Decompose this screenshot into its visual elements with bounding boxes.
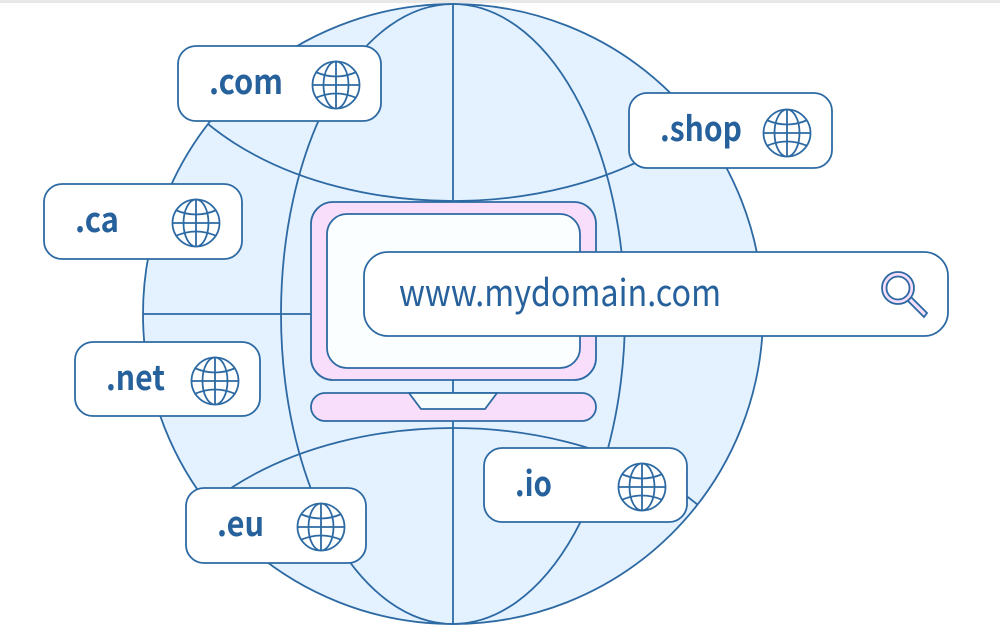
tag: .eu: .eu — [217, 497, 264, 546]
top edge line — [0, 0, 1000, 3]
icon: magnifying glass — [882, 272, 927, 317]
tag: .shop — [629, 93, 832, 168]
tag: .io — [484, 448, 687, 522]
search bar — [364, 252, 948, 336]
tag: .ca: .ca — [75, 193, 119, 242]
tag: .net — [75, 342, 260, 416]
tag: .io: .io — [515, 457, 552, 506]
tag: .shop: .shop — [660, 102, 742, 151]
monitor — [311, 202, 596, 421]
search bar: www.mydomain.com — [399, 263, 721, 317]
tag: .com: .com — [209, 55, 283, 104]
tag: .net: .net — [106, 351, 165, 400]
tag: .com — [178, 46, 381, 121]
large globe — [143, 2, 763, 627]
tag: .eu — [186, 488, 366, 563]
tag: .ca — [44, 184, 242, 259]
